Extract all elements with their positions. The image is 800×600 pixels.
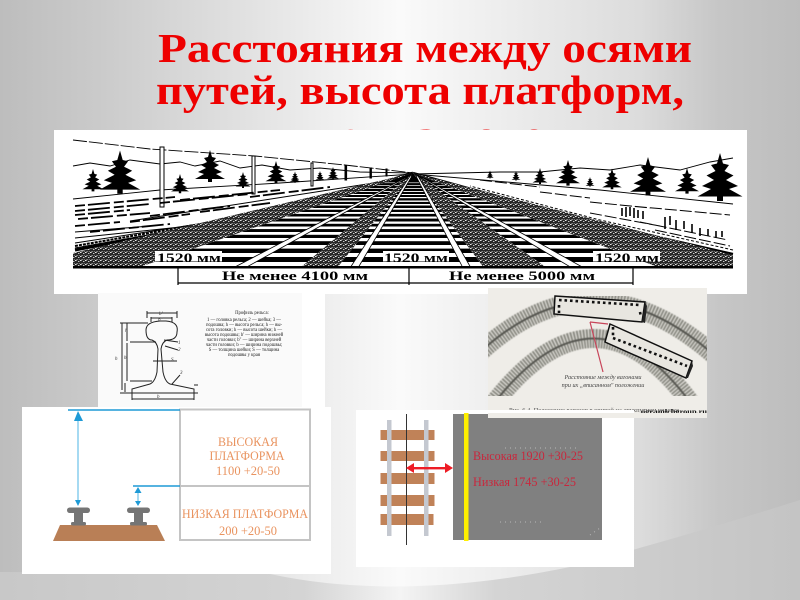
rail profile labels: h: [125, 329, 128, 334]
dimension labels: [222, 268, 595, 283]
rail left: [67, 508, 90, 526]
distance labels: Низкая 1745 +30-25: [473, 474, 576, 489]
platform plan: [453, 414, 602, 540]
faint dots: [500, 448, 600, 535]
rail right: [127, 508, 150, 526]
figure caption: Рис. 6.4. Положение вагонов в кривой на двухпутном участке: [509, 407, 679, 414]
title: путей, высота платформ,: [156, 67, 684, 113]
rail cross-section drawing: [120, 311, 198, 400]
rails: [233, 176, 584, 268]
panel: rail profile: [98, 293, 325, 408]
rail profile labels: b": [158, 318, 164, 323]
height lines: [68, 410, 180, 486]
figure caption strip over platform plan: [488, 413, 707, 418]
track axis: [406, 414, 408, 545]
rail profile description: сота головки; h — высота шейки; h —: [206, 328, 282, 333]
rail profile labels: 3: [180, 371, 183, 376]
dimension labels: Не менее 5000 мм: [449, 268, 595, 283]
platform labels: 200 +20-50: [219, 524, 277, 538]
poles: [160, 147, 387, 207]
curved tracks: [488, 296, 707, 396]
red distance arrow: [406, 463, 453, 473]
rail profile description: [205, 311, 284, 358]
platform table: [180, 410, 310, 540]
trees right: [486, 153, 742, 201]
high platform arrow: [74, 411, 83, 506]
yellow edge: [464, 413, 468, 541]
platform labels: НИЗКАЯ ПЛАТФОРМА: [182, 507, 308, 521]
platform labels: ВЫСОКАЯ: [218, 435, 278, 449]
rail profile description: высота подошвы; b' — ширина нижней: [205, 333, 284, 338]
ballast shoulders: [73, 173, 733, 268]
rail profile labels: [115, 312, 183, 400]
photo caption: Расстояние между вагонами: [563, 374, 642, 381]
trees left: [82, 150, 339, 194]
title: Расстояния между осями: [158, 25, 692, 71]
dimension labels: Не менее 4100 мм: [222, 268, 368, 283]
panel: track to platform distance diagram: [356, 410, 634, 567]
rail profile labels: h: [115, 357, 118, 362]
gauge labels: 1520 мм: [157, 250, 221, 265]
rail profile labels: h: [124, 356, 127, 361]
red distance pointer: [590, 322, 608, 372]
watermark: ogr-unichgroup.ru: [641, 407, 707, 416]
dimension brackets: [178, 268, 633, 285]
panel: track perspective drawing: [54, 130, 747, 294]
gauge labels: [155, 250, 660, 265]
car 2: [605, 324, 693, 378]
gauge labels: 1520 мм: [595, 250, 659, 265]
rail profile description: части головки; b" — ширина верхней: [207, 338, 282, 343]
rail profile description: 1 — головка рельса; 2 — шейка; 3 —: [207, 318, 281, 323]
distance labels: [473, 448, 583, 489]
title: ширина колеи: [270, 112, 570, 158]
sleepers plan: [380, 430, 434, 525]
ground hatching right: [413, 173, 733, 254]
rail profile description: подошвы у края: [228, 353, 261, 358]
ground hatching left: [75, 173, 413, 250]
rail profile description: подошва; h — высота рельса; h — вы-: [206, 323, 282, 328]
rail profile labels: 2: [178, 348, 181, 353]
photo caption: при их „вписанном" положении: [562, 382, 644, 389]
sleeper: [53, 525, 165, 541]
title: [156, 25, 692, 158]
rail profile labels: S: [171, 358, 174, 363]
panel: cars on a curved track photo: [488, 288, 707, 413]
distance labels: Высокая 1920 +30-25: [473, 448, 583, 463]
platform labels: 1100 +20-50: [216, 464, 280, 478]
rail profile description: S — толщина шейки; S — толщина: [209, 348, 280, 353]
rail profile labels: b: [157, 395, 160, 400]
sleepers: [143, 173, 654, 266]
gauge labels: 1520 мм: [384, 250, 448, 265]
ground line: [73, 266, 733, 268]
platform labels: ПЛАТФОРМА: [210, 449, 284, 463]
photo caption: [562, 374, 644, 389]
rail profile labels: b': [159, 312, 164, 317]
panel: platform height diagram: [22, 407, 331, 574]
rail profile labels: 1: [178, 341, 180, 346]
car 1: [554, 296, 647, 323]
low platform arrow: [134, 487, 142, 506]
rail profile description: части головки; b — ширина подошвы;: [206, 343, 282, 348]
platform labels: [182, 435, 308, 538]
rail profile description: Профиль рельса:: [235, 311, 269, 316]
rails plan: [387, 420, 428, 536]
hills and wires: [73, 140, 733, 204]
